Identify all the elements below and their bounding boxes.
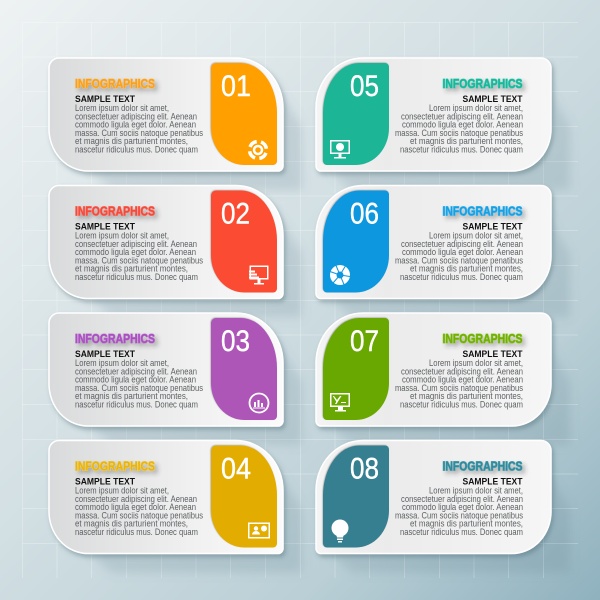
card 04 [49, 440, 283, 554]
body text 04: commodo ligula eget dolor. Aenean [75, 502, 196, 513]
body text 05: Lorem ipsum dolor sit amet, [429, 103, 523, 114]
body text 07: commodo ligula eget dolor. Aenean [402, 375, 523, 386]
body text 01: et magnis dis parturient montes, [75, 136, 188, 147]
body text 06: et magnis dis parturient montes, [410, 264, 523, 275]
body text 01: consectetuer adipiscing elit. Aenean [75, 111, 197, 122]
color panel 02 [211, 190, 277, 292]
color panel 03 [211, 318, 277, 420]
body text 02: massa. Cum sociis natoque penatibus [75, 255, 203, 266]
number 06: 06 [350, 198, 379, 230]
body text 04: et magnis dis parturient montes, [75, 519, 188, 530]
icon: monitor with bars [249, 266, 268, 284]
body text 06: consectetuer adipiscing elit. Aenean [401, 239, 523, 250]
body text 07: Lorem ipsum dolor sit amet, [429, 358, 523, 369]
body text 01: nascetur ridiculus mus. Donec quam [75, 144, 198, 156]
body text 07: nascetur ridiculus mus. Donec quam [400, 400, 523, 410]
card 06 [316, 186, 551, 298]
card 01 [49, 58, 283, 171]
long card shadows [90, 75, 570, 572]
number 01: 01 [221, 70, 251, 103]
body text 07: consectetuer adipiscing elit. Aenean [401, 366, 523, 377]
subheading 02: SAMPLE TEXT [75, 222, 135, 232]
icon: camera aperture [330, 265, 350, 285]
heading 06: INFOGRAPHICS [442, 204, 523, 218]
number 02: 02 [221, 198, 250, 230]
color panel 01 [211, 63, 277, 165]
body text 08: et magnis dis parturient montes, [410, 519, 523, 530]
body text 06: massa. Cum sociis natoque penatibus [395, 255, 523, 266]
body text 08: nascetur ridiculus mus. Donec quam [400, 527, 523, 538]
icon: presentation board [248, 522, 270, 538]
body text 02: nascetur ridiculus mus. Donec quam [75, 272, 198, 283]
body text 04: nascetur ridiculus mus. Donec quam [75, 527, 198, 538]
color panel 04 [211, 446, 277, 548]
card 03 [49, 313, 283, 426]
subheading 05: SAMPLE TEXT [462, 94, 523, 105]
body text 03: nascetur ridiculus mus. Donec quam [75, 400, 198, 410]
body text 02: Lorem ipsum dolor sit amet, [75, 230, 169, 242]
body text 07: massa. Cum sociis natoque penatibus [395, 383, 523, 394]
color panel 07 [323, 318, 389, 420]
body text 03: consectetuer adipiscing elit. Aenean [75, 366, 197, 377]
number 04: 04 [221, 452, 251, 486]
body text 05: et magnis dis parturient montes, [410, 136, 523, 147]
body text 01 [75, 103, 203, 156]
heading 07: INFOGRAPHICS [442, 331, 523, 346]
subheading 08: SAMPLE TEXT [462, 476, 523, 488]
body text 02: commodo ligula eget dolor. Aenean [75, 247, 196, 258]
color panel 08 [323, 446, 389, 548]
body text 06 [395, 230, 523, 283]
card 02 [49, 186, 283, 298]
number 07: 07 [350, 325, 379, 358]
body text 01: massa. Cum sociis natoque penatibus [75, 128, 203, 139]
subheading 03: SAMPLE TEXT [75, 349, 135, 360]
body text 03 [75, 358, 203, 410]
body text 05: consectetuer adipiscing elit. Aenean [401, 111, 523, 122]
body text 04 [75, 486, 203, 538]
body text 04: Lorem ipsum dolor sit amet, [75, 486, 169, 496]
body text 02 [75, 230, 203, 283]
heading 03: INFOGRAPHICS [75, 331, 155, 346]
subheading 04: SAMPLE TEXT [75, 476, 135, 488]
body text 06: nascetur ridiculus mus. Donec quam [400, 272, 523, 283]
body text 01: commodo ligula eget dolor. Aenean [75, 120, 196, 131]
body text 04: consectetuer adipiscing elit. Aenean [75, 494, 197, 505]
body text 02: consectetuer adipiscing elit. Aenean [75, 239, 197, 250]
body text 08: Lorem ipsum dolor sit amet, [429, 486, 523, 496]
body text 04: massa. Cum sociis natoque penatibus [75, 510, 203, 521]
body text 08: consectetuer adipiscing elit. Aenean [401, 494, 523, 505]
body text 08 [395, 486, 523, 538]
heading 01: INFOGRAPHICS [75, 76, 155, 91]
body text 05: massa. Cum sociis natoque penatibus [395, 128, 523, 139]
number 08: 08 [350, 452, 379, 486]
subheading 06: SAMPLE TEXT [462, 222, 523, 232]
icon: target chart [250, 394, 268, 412]
color panel 06 [323, 190, 389, 292]
body text 06: Lorem ipsum dolor sit amet, [429, 230, 523, 242]
body text 05 [395, 103, 523, 156]
body text 07 [395, 358, 523, 410]
card 08 [316, 440, 551, 554]
heading 04: INFOGRAPHICS [75, 458, 155, 474]
card 07 [316, 313, 551, 426]
body text 03: Lorem ipsum dolor sit amet, [75, 358, 169, 369]
body text 07: et magnis dis parturient montes, [410, 391, 523, 402]
body text 08: commodo ligula eget dolor. Aenean [402, 502, 523, 513]
body text 05: nascetur ridiculus mus. Donec quam [400, 144, 523, 156]
body text 03: commodo ligula eget dolor. Aenean [75, 375, 196, 386]
icon: light bulb [332, 520, 348, 542]
number 05: 05 [350, 70, 379, 103]
subheading 07: SAMPLE TEXT [462, 349, 523, 360]
icon: monitor with graph [330, 393, 350, 412]
heading 05: INFOGRAPHICS [442, 76, 523, 91]
icon: monitor with pie [330, 140, 350, 158]
body text 02: et magnis dis parturient montes, [75, 264, 188, 275]
number 03: 03 [221, 325, 250, 358]
heading 08: INFOGRAPHICS [442, 458, 523, 474]
icon: target arrows [247, 139, 269, 161]
body text 06: commodo ligula eget dolor. Aenean [402, 247, 523, 258]
body text 05: commodo ligula eget dolor. Aenean [402, 120, 523, 131]
body text 01: Lorem ipsum dolor sit amet, [75, 103, 169, 114]
color panel 05 [323, 63, 389, 165]
body text 08: massa. Cum sociis natoque penatibus [395, 510, 523, 521]
subheading 01: SAMPLE TEXT [75, 94, 135, 105]
body text 03: et magnis dis parturient montes, [75, 391, 188, 402]
heading 02: INFOGRAPHICS [75, 204, 155, 218]
body text 03: massa. Cum sociis natoque penatibus [75, 383, 203, 394]
card 05 [316, 58, 551, 171]
